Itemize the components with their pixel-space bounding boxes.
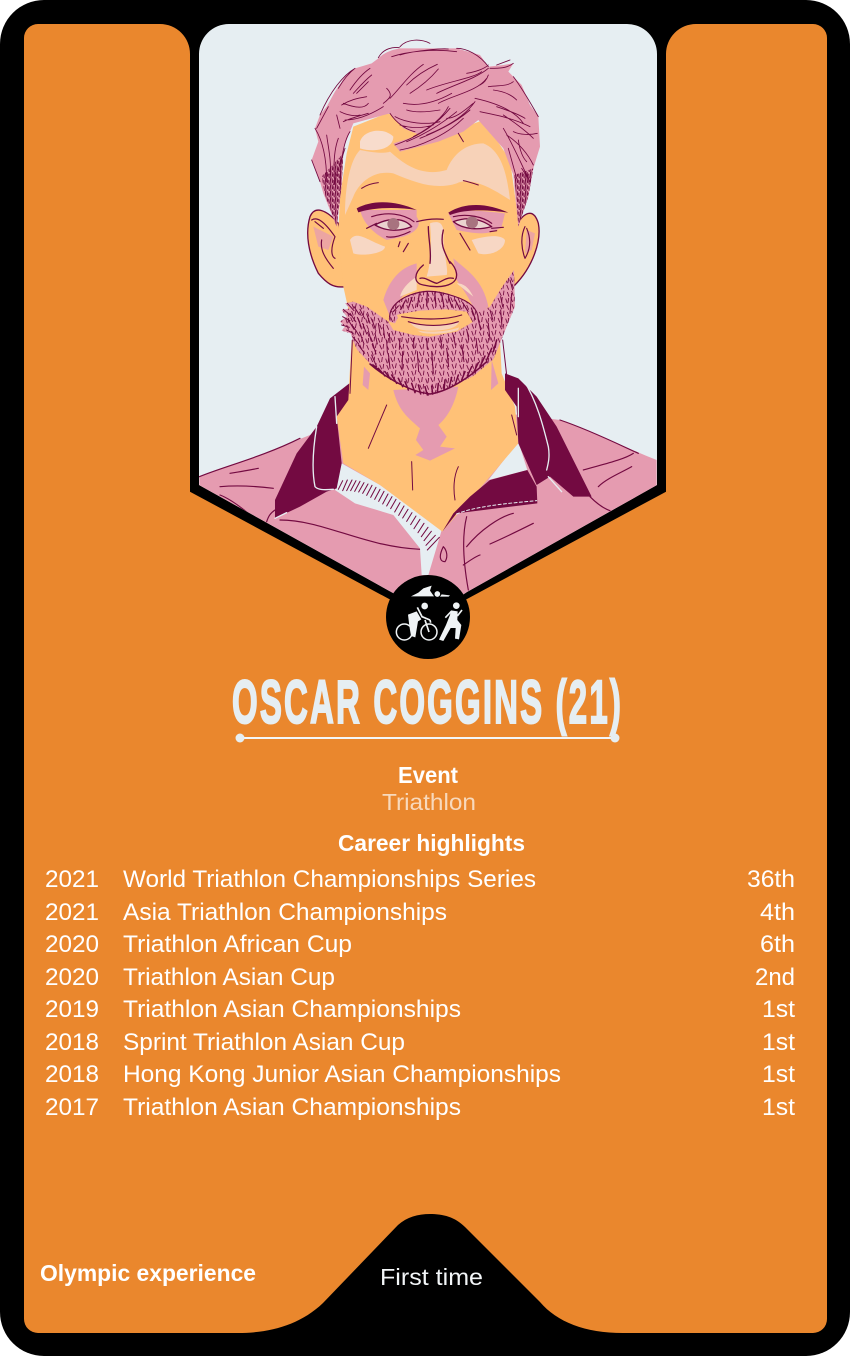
- portrait panel: [199, 24, 657, 624]
- row 2018 sprint: 2018: [45, 1029, 99, 1056]
- beard and mouth: [340, 270, 515, 396]
- event heading: Event: [398, 762, 458, 788]
- eye creases: [367, 214, 503, 252]
- cheek shading: [383, 258, 488, 317]
- collar left: [275, 383, 349, 518]
- irises: [387, 216, 478, 230]
- sideburn left: [322, 153, 343, 227]
- moustache hatching: [390, 291, 478, 320]
- eyebrows: [357, 202, 508, 215]
- triathlon icon badge: [386, 575, 470, 659]
- row 2021 series: [45, 866, 795, 893]
- row 2021 series: 36th: [747, 866, 795, 893]
- olympic experience value: First time: [380, 1264, 483, 1290]
- row 2018 hong kong: 1st: [762, 1061, 795, 1088]
- collar right: [505, 373, 592, 497]
- nose highlight: [427, 222, 447, 277]
- face: [338, 113, 518, 347]
- sideburn right: [514, 168, 533, 227]
- right cheek highlight: [472, 236, 505, 254]
- career highlights heading: Career highlights: [338, 830, 525, 856]
- row 2020 asian cup: [45, 964, 795, 991]
- swimmer: [411, 586, 450, 597]
- neck lines: [350, 340, 517, 500]
- lips: [397, 311, 467, 335]
- hair: [312, 48, 540, 227]
- row 2017: 2017: [45, 1094, 99, 1121]
- row 2018 hong kong: 2018: [45, 1061, 99, 1088]
- ear shading: [313, 227, 535, 253]
- row 2021 asia: 2021: [45, 899, 99, 926]
- lower lip highlight: [410, 322, 459, 334]
- row 2017: 1st: [762, 1094, 795, 1121]
- pale moustache surround: [400, 277, 473, 297]
- neck shadow: [393, 387, 458, 461]
- row 2018 sprint: Sprint Triathlon Asian Cup: [123, 1029, 405, 1056]
- name underline: [236, 734, 620, 742]
- row 2019: [45, 996, 795, 1023]
- row 2020 african cup: 6th: [760, 931, 795, 958]
- row 2019: 1st: [762, 996, 795, 1023]
- placket hatching: [338, 480, 439, 550]
- row 2018 sprint: 1st: [762, 1029, 795, 1056]
- icon: triathlon figures: [396, 586, 462, 641]
- mouth lines: [402, 315, 462, 325]
- collar stitching: [457, 501, 537, 514]
- cyclist: [396, 603, 437, 640]
- eyes: [375, 219, 492, 230]
- nose lines: [416, 227, 457, 287]
- row 2020 african cup: [45, 931, 795, 958]
- collar front flap: [442, 470, 537, 532]
- row 2020 african cup: 2020: [45, 931, 99, 958]
- badge circle: [386, 575, 470, 659]
- white placket: [335, 463, 442, 575]
- row 2020 asian cup: 2nd: [755, 964, 795, 991]
- pale triangle behind collar: [488, 442, 527, 480]
- left ear: [308, 210, 347, 287]
- row 2020 asian cup: 2020: [45, 964, 99, 991]
- row 2021 series: World Triathlon Championships Series: [123, 866, 536, 893]
- career highlights table: [45, 866, 795, 1121]
- row 2020 african cup: Triathlon African Cup: [123, 931, 352, 958]
- row 2020 asian cup: Triathlon Asian Cup: [123, 964, 335, 991]
- row 2019: 2019: [45, 996, 99, 1023]
- row 2019: Triathlon Asian Championships: [123, 996, 461, 1023]
- row 2021 asia: 4th: [760, 899, 795, 926]
- row 2018 sprint: [45, 1029, 795, 1056]
- moustache: [389, 290, 479, 323]
- hair strokes: [312, 40, 538, 185]
- row 2018 hong kong: [45, 1061, 795, 1088]
- beard: [340, 270, 515, 396]
- neck: [337, 340, 518, 532]
- beard lower dense hatching: [370, 340, 497, 395]
- row 2021 asia: Asia Triathlon Championships: [123, 899, 447, 926]
- row 2017: Triathlon Asian Championships: [123, 1094, 461, 1121]
- collar highlights: [275, 380, 562, 518]
- forehead highlights: [345, 143, 510, 215]
- runner: [439, 602, 462, 641]
- row 2021 series: 2021: [45, 866, 99, 893]
- eye socket shading: [360, 210, 505, 240]
- neck side shading: [363, 360, 498, 390]
- portrait illustration: [199, 40, 657, 620]
- left cheek highlight: [350, 236, 385, 255]
- event value: Triathlon: [382, 789, 476, 815]
- row 2017: [45, 1094, 795, 1121]
- right ear: [510, 213, 539, 286]
- olympic experience label: Olympic experience: [40, 1260, 256, 1286]
- forehead lines: [362, 133, 478, 188]
- shirt outlines and folds: [199, 420, 638, 590]
- row 2021 asia: [45, 899, 795, 926]
- beard hatching: [342, 280, 513, 373]
- row 2018 hong kong: Hong Kong Junior Asian Championships: [123, 1061, 561, 1088]
- shirt: [199, 414, 657, 594]
- ear details: [312, 219, 530, 268]
- forehead patch: [360, 131, 393, 150]
